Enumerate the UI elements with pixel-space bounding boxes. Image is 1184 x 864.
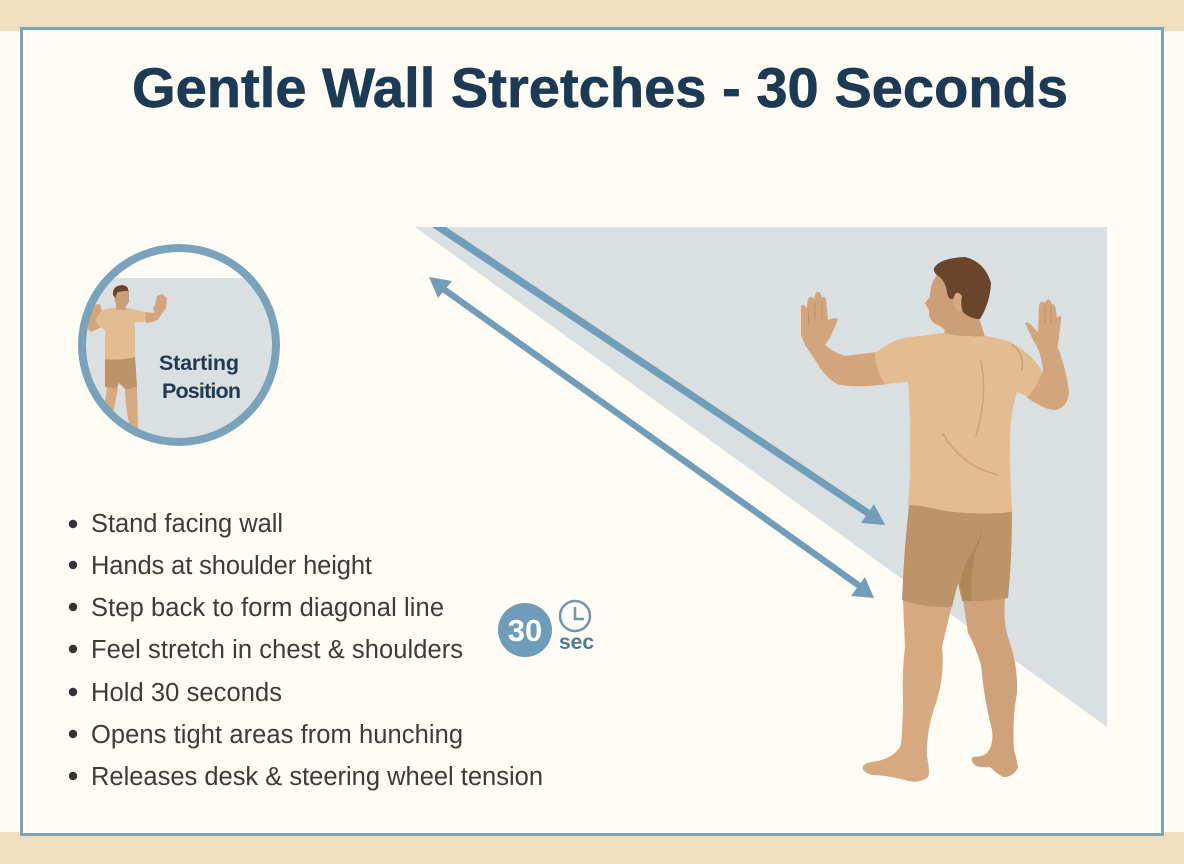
icon: clock bbox=[560, 601, 590, 631]
inset figure bbox=[87, 285, 167, 430]
inset background bbox=[86, 278, 272, 438]
instructions list: Step back to form diagonal line bbox=[91, 594, 444, 622]
instructions list: Hands at shoulder height bbox=[91, 552, 372, 580]
sec label: sec bbox=[559, 631, 594, 654]
arrow: along the wall edge bbox=[432, 227, 885, 525]
inset ring bbox=[82, 248, 276, 442]
title: Gentle Wall Stretches - 30 Seconds bbox=[132, 56, 1068, 119]
timer badge bbox=[498, 601, 594, 657]
badge number: 30 bbox=[508, 613, 542, 648]
shorts bbox=[902, 505, 1012, 607]
left arm bbox=[804, 343, 887, 386]
30 circle bbox=[498, 603, 552, 657]
t-shirt bbox=[875, 333, 1043, 514]
instructions list bbox=[69, 510, 543, 791]
inset label: Starting bbox=[159, 351, 239, 375]
inset label: Position bbox=[162, 379, 241, 403]
neck and face bbox=[925, 275, 985, 337]
right arm bbox=[1026, 340, 1069, 410]
left leg bbox=[863, 600, 952, 782]
inset: starting position bbox=[80, 248, 280, 448]
inset label bbox=[159, 351, 241, 403]
wall panel bbox=[415, 227, 1107, 727]
shirt fold lines bbox=[943, 345, 1022, 475]
right hand bbox=[1025, 299, 1061, 352]
instructions list: Opens tight areas from hunching bbox=[91, 721, 463, 749]
left hand bbox=[801, 292, 838, 347]
ear bbox=[953, 291, 964, 311]
top beige band bbox=[0, 0, 1184, 31]
bottom beige band bbox=[0, 832, 1184, 864]
instructions list: Releases desk & steering wheel tension bbox=[91, 763, 543, 791]
main figure bbox=[801, 257, 1069, 782]
hair bbox=[934, 257, 991, 319]
instructions list: Feel stretch in chest & shoulders bbox=[91, 636, 463, 664]
arrow: double-headed diagonal bbox=[429, 277, 874, 598]
instructions list: Hold 30 seconds bbox=[91, 679, 282, 707]
instructions list: Stand facing wall bbox=[91, 510, 283, 538]
right leg bbox=[963, 598, 1018, 777]
